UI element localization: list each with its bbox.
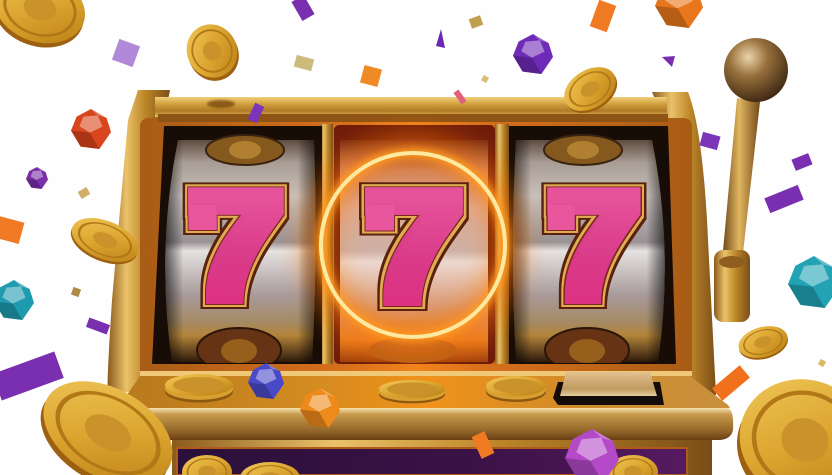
middle seven: 7 bbox=[363, 159, 465, 335]
shelf coins bbox=[165, 374, 546, 403]
reel window left bbox=[152, 126, 322, 372]
left pillar bbox=[108, 90, 170, 395]
reel middle bbox=[340, 140, 488, 362]
shelf button bbox=[553, 372, 664, 405]
reel right bottom emblem bbox=[544, 327, 630, 363]
lower cabinet bbox=[172, 436, 712, 475]
reel left bottom emblem bbox=[196, 327, 282, 363]
left seven: 7 bbox=[186, 160, 286, 332]
reel middle bottom emblem bbox=[369, 337, 457, 363]
frame dividers bbox=[320, 124, 509, 364]
reel right bbox=[513, 140, 665, 362]
slot machine bbox=[108, 38, 788, 475]
reel window right bbox=[509, 126, 676, 372]
reel window middle bbox=[334, 125, 495, 364]
top bar bbox=[155, 97, 668, 122]
right seven: 7 bbox=[545, 159, 643, 333]
inner frame bbox=[140, 118, 692, 380]
shelf bbox=[112, 371, 733, 440]
lower coins bbox=[182, 455, 658, 475]
lever bbox=[714, 38, 788, 322]
reel right top emblem bbox=[544, 135, 622, 165]
glowing ring bbox=[317, 149, 509, 341]
right pillar bbox=[652, 92, 716, 395]
reel left top emblem bbox=[206, 135, 284, 165]
reel left bbox=[165, 140, 316, 362]
